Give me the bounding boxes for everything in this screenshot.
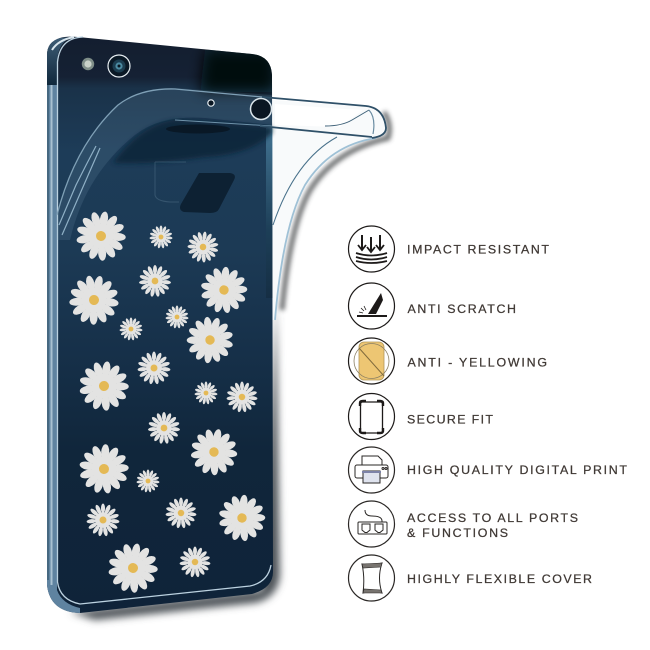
icon: bent cover [348, 555, 394, 601]
inner rim [175, 120, 272, 126]
icon: yellow case crossed out [348, 338, 394, 384]
case slot [166, 124, 230, 134]
label: & FUNCTIONS [407, 526, 508, 540]
curl inner line [273, 137, 337, 225]
label [407, 511, 578, 540]
phone in clear case [47, 37, 389, 620]
speaker ring [250, 98, 272, 120]
label: HIGHLY FLEXIBLE COVER [407, 572, 592, 586]
label: IMPACT RESISTANT [407, 242, 549, 256]
label: HIGH QUALITY DIGITAL PRINT [407, 463, 627, 477]
icon: phone case corners [348, 394, 394, 440]
icon: ports [348, 501, 394, 547]
side button [59, 146, 100, 235]
label: ANTI - YELLOWING [408, 356, 547, 370]
dark top right glass [200, 50, 275, 92]
feature: anti scratch [348, 283, 516, 329]
curled case body [272, 100, 386, 320]
daisy pattern [63, 207, 268, 597]
fingerprint outline [155, 162, 186, 202]
case top shadow area [113, 120, 272, 163]
small hole [208, 100, 214, 106]
icon: blade scratching surface [348, 283, 394, 329]
case rim [57, 89, 262, 215]
rim lines [260, 97, 386, 138]
rim diagonal [325, 110, 369, 126]
shadow along curled corner [282, 112, 389, 310]
icon: printer [348, 447, 394, 493]
feature: secure fit [348, 394, 493, 440]
label: ANTI SCRATCH [408, 302, 516, 316]
case drop shadow [70, 300, 280, 620]
phone body [47, 37, 273, 613]
label: ACCESS TO ALL PORTS [407, 511, 578, 525]
label: SECURE FIT [407, 412, 493, 426]
feature: impact resistant [348, 226, 549, 272]
translucent case corner [57, 88, 272, 240]
fingerprint cut-out [180, 173, 235, 213]
feature: anti yellowing [348, 338, 547, 384]
camera flash [82, 58, 94, 70]
bright edge highlights [58, 37, 271, 604]
feature: flexible cover [348, 555, 592, 601]
camera lens [108, 55, 130, 77]
right edge strip [266, 128, 272, 298]
left case edge [47, 37, 80, 613]
feature: access to ports [348, 501, 578, 547]
feature: digital print [348, 447, 627, 493]
bright top-left corner [52, 37, 74, 50]
curl outer highlight [275, 138, 376, 320]
icon: impact arrows [348, 226, 394, 272]
rim opening shading [275, 104, 363, 127]
tip inner line [369, 110, 374, 134]
